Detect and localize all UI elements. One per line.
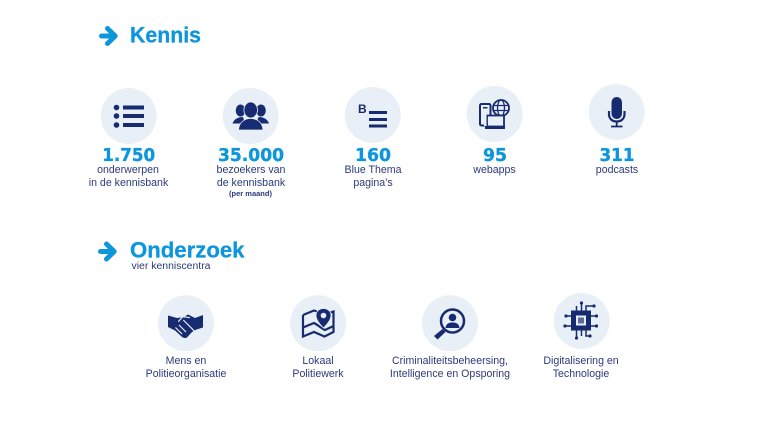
label: Lokaal Politiewerk: Politiewerk bbox=[292, 368, 344, 380]
stat: Blue Thema bbox=[345, 87, 402, 189]
label: Blue Thema pagina's: Blue Thema bbox=[345, 164, 402, 176]
label: bezoekers van de kennisbank: bezoekers van bbox=[217, 164, 286, 176]
label: onderwerpen in de kennisbank: onderwerpen bbox=[97, 164, 159, 176]
label: Lokaal Politiewerk: Lokaal bbox=[302, 355, 334, 367]
number: 311: 311 bbox=[600, 146, 634, 166]
centre: Criminaliteitsbeheersing bbox=[390, 295, 510, 380]
subtitle: vier kenniscentra: vier kenniscentra bbox=[132, 261, 211, 272]
centre: Lokaal Politiewerk bbox=[290, 295, 346, 380]
icon: people bbox=[223, 88, 279, 144]
label: Digitalisering en Technologie: Technologie bbox=[553, 368, 609, 380]
icon: devices and globe bbox=[467, 86, 523, 142]
title: Onderzoek: Onderzoek bbox=[130, 238, 245, 262]
label: Criminaliteitsbeheersing, Intelligence en Opsporing: Intelligence en Opsporing bbox=[390, 368, 510, 380]
icon: list bbox=[101, 88, 157, 144]
icon: map with pin bbox=[290, 295, 346, 351]
title: Kennis: Kennis bbox=[130, 22, 201, 48]
stat: podcasts bbox=[589, 84, 645, 176]
number: 1.750: 1.750 bbox=[102, 146, 155, 166]
label: Blue Thema pagina's: pagina’s bbox=[353, 177, 393, 189]
icon: arrow Kennis bbox=[102, 28, 115, 44]
label: webapps: webapps bbox=[472, 164, 516, 176]
icon: arrow Onderzoek bbox=[100, 244, 114, 259]
label: Criminaliteitsbeheersing, Intelligence en Opsporing: Criminaliteitsbeheersing, bbox=[392, 355, 508, 367]
number: 95: 95 bbox=[483, 146, 507, 166]
icon: B with lines: B bbox=[358, 102, 367, 116]
label: Mens en Politieorganisatie: Politieorganisatie bbox=[146, 368, 226, 380]
heading: Kennis bbox=[102, 22, 201, 48]
label: podcasts: podcasts bbox=[596, 164, 638, 176]
note: per maand: (per maand) bbox=[229, 189, 272, 198]
icon: microchip bbox=[554, 293, 610, 349]
stat: webapps bbox=[467, 86, 523, 176]
number: 35.000: 35.000 bbox=[218, 146, 284, 166]
centre: Digitalisering en Technologie bbox=[543, 293, 619, 380]
number: 160: 160 bbox=[355, 146, 391, 166]
icon: microphone bbox=[589, 84, 645, 140]
centre: Mens en Politieorganisatie bbox=[146, 295, 226, 380]
label: bezoekers van de kennisbank: de kennisbank bbox=[217, 177, 286, 189]
label: Digitalisering en Technologie: Digitalisering en bbox=[543, 355, 619, 367]
stat: onderwerpen bbox=[89, 88, 169, 189]
stat: bezoekers bbox=[217, 88, 286, 198]
label: Mens en Politieorganisatie: Mens en bbox=[166, 355, 206, 367]
heading: Onderzoek bbox=[100, 238, 245, 272]
icon: handshake bbox=[158, 295, 214, 351]
icon: magnifier with person bbox=[422, 295, 478, 351]
label: onderwerpen in de kennisbank: in de kennisbank bbox=[89, 177, 169, 189]
